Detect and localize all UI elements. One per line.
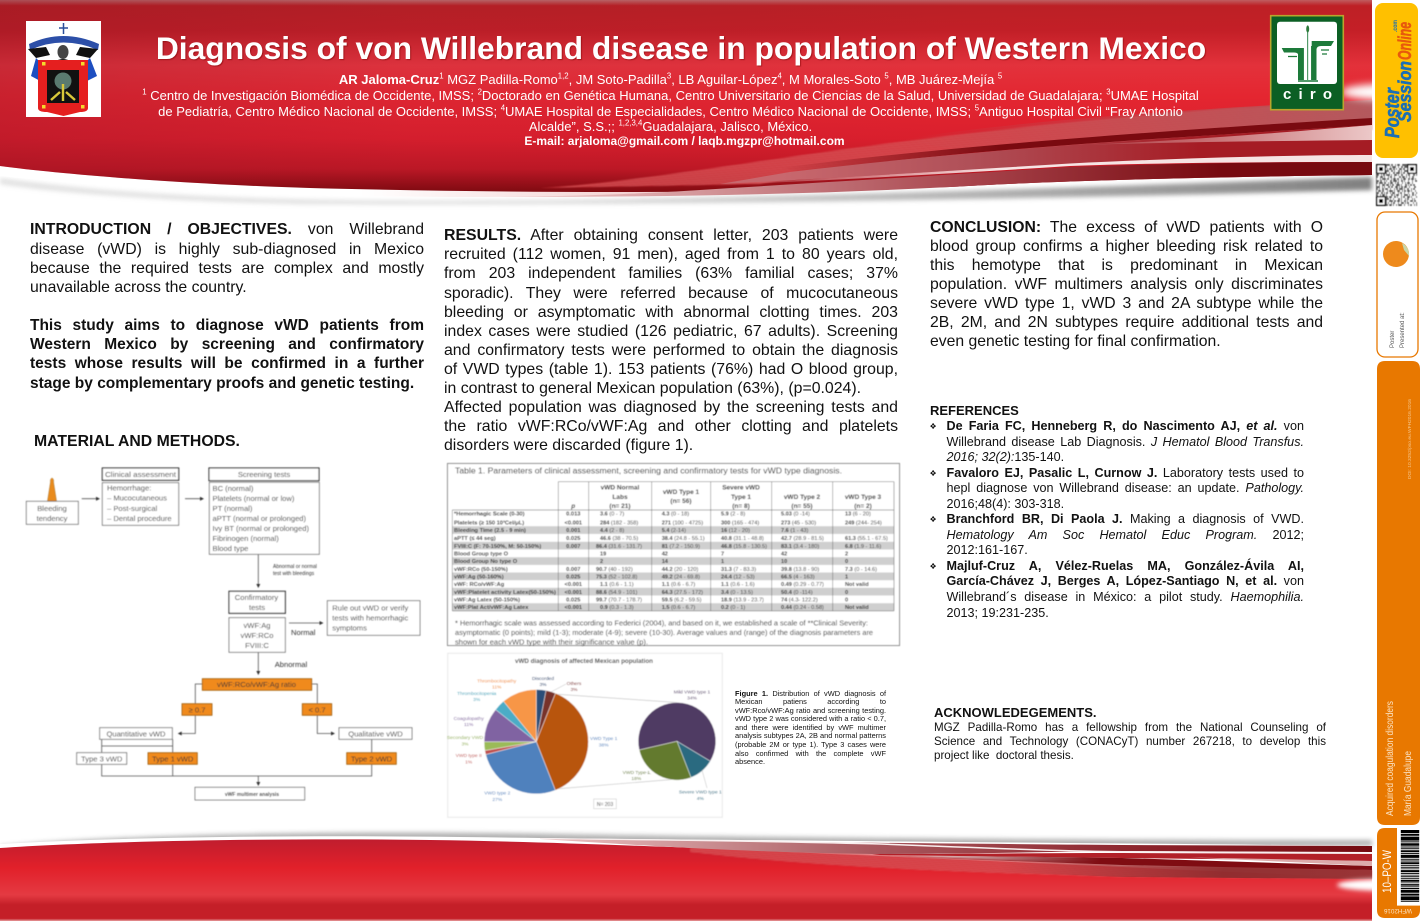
- sidebar: poster code and barcode: WFH2016: [1384, 907, 1412, 914]
- pie data labels: Secondary VWD: [447, 735, 484, 741]
- pie data labels: VWD type 2: [484, 790, 511, 796]
- text block: introduction and objectives: [30, 221, 424, 296]
- table 1: parameters: Not valid: [845, 582, 869, 588]
- table 1: parameters: 4.4 (2 - 8): [600, 528, 624, 534]
- table title: Table 1. Parameters of clinical assessment, screening and confirmatory tests for vWD type diagnosis.: [455, 466, 842, 476]
- CIRO logo: [1271, 16, 1343, 110]
- table footnote: asymptomatic (0 points); mild (1-3); moderate (4-9); severe (10-30). Average values and (range) of the diagnosis parameters are: [455, 628, 873, 637]
- table 1: parameters: vWD Normal: [601, 484, 640, 492]
- sidebar: PosterSessionOnline tab: [1375, 3, 1418, 158]
- table 1: parameters: vWD Type 3: [845, 494, 882, 501]
- table 1: parameters: 86.4 (31.6 - 131.7): [596, 544, 642, 550]
- table 1: parameters: vWF:Ag Latex (50-150%): [454, 597, 520, 603]
- text block: study aim: This study aims to diagnose vWD patients from: [30, 317, 424, 334]
- sidebar: orange details panel: DOI: 10.3252/pso.eu.WFH2016.2016: [1407, 399, 1413, 479]
- text block: introduction and objectives: because the required tests are complex and mostly: [30, 260, 424, 277]
- footer banner: [0, 832, 1424, 921]
- table 1: parameters: 249 (244- 254): [845, 520, 882, 526]
- figure 1 caption: absence.: [735, 757, 765, 766]
- secondary pie: [638, 702, 716, 780]
- sidebar: PosterSessionOnline tab: Online: [1395, 22, 1415, 60]
- pie data labels: VWD Type 1: [590, 736, 618, 742]
- pie data labels: 38%: [599, 742, 609, 748]
- table 1: parameters: 61.3 (55.1 - 67.5): [845, 536, 888, 542]
- text block: results: the ratio vWF:RCo/vWF:Ag and other clotting and platelets: [444, 418, 898, 435]
- flowchart: diagnostic algorithm: Ivy BT (normal or prolonged): [212, 524, 309, 533]
- table 1: parameters: <0.001: [565, 520, 582, 526]
- pie data labels: 27%: [492, 797, 503, 803]
- table 1: parameters: 1.1 (0.6 - 1.1): [600, 582, 634, 588]
- table 1: parameters: 42: [781, 551, 787, 557]
- acknowledgements text: MGZ Padilla-Romo has a fellowship from the National Counseling of: [934, 720, 1326, 734]
- table 1: parameters: 3.4 (0 - 13.5): [721, 590, 753, 596]
- sidebar: presented-at card: Presented at:: [1400, 312, 1406, 348]
- flowchart: diagnostic algorithm: tests with hemorrhagic: [332, 614, 408, 622]
- sidebar: orange details panel: [1377, 361, 1420, 825]
- table 1: parameters: 6.8 (1.9 - 11.6): [845, 544, 881, 550]
- flowchart: diagnostic algorithm: – Mucocutaneous: [107, 494, 167, 502]
- table 1: parameters: 46.6 (38 - 70.5): [600, 536, 638, 542]
- table footnote: [455, 618, 873, 646]
- pie data labels: Discorded: [532, 676, 554, 682]
- table footnote: shown for each vWD type with their significance value (p).: [455, 637, 648, 646]
- pie data labels: 3%: [539, 682, 547, 688]
- affiliations: de Pediatría, Centro Médico Nacional de Occidente, IMSS; 4UMAE Hospital de Especialidades, Centro Médico Nacional de Occidente, IMSS; 5Antiguo Hospital Civil “Fray Antonio: [158, 103, 1183, 118]
- table 1: parameters: 75.3 (52 - 102.8): [596, 574, 637, 580]
- table 1: parameters: *Hemorrhagic Scale (0-30): [454, 511, 525, 517]
- flowchart: diagnostic algorithm: < 0.7: [308, 706, 326, 714]
- table 1: parameters: 0.025: [566, 597, 580, 603]
- table 1: parameters: vWF:RCo (50-150%): [454, 567, 508, 573]
- flowchart: diagnostic algorithm: Rule out vWD or verify: [332, 604, 408, 612]
- references list: De Faria FC, Henneberg R, do Nascimento AJ, et al. von: [946, 419, 1304, 433]
- table 1: parameters: 1.1 (0.6 - 1.6): [721, 582, 755, 588]
- text block: study aim: Western Mexico by screening and confirmatory: [30, 336, 424, 353]
- text block: results: sporadic). They were referred because of mucocutaneous: [444, 285, 898, 302]
- figure 1 caption: vWD type 2 was considered with a ratio < 0.7,: [735, 714, 886, 723]
- table 1: parameters: 0.007: [566, 544, 580, 550]
- references list: 2012:161-167.: [946, 543, 1028, 557]
- pie data labels: Thrombocitopenia: [457, 691, 497, 697]
- flowchart: diagnostic algorithm: Abnormal: [275, 660, 308, 669]
- flowchart: diagnostic algorithm: tendency: [37, 514, 68, 523]
- sidebar: PosterSessionOnline tab: Session: [1395, 61, 1415, 122]
- table 1: parameters: 0: [845, 597, 848, 603]
- flowchart: diagnostic algorithm: aPTT (normal or prolonged): [212, 514, 307, 523]
- flowchart: diagnostic algorithm: – Dental procedure: [107, 514, 172, 523]
- table 1: parameters: 5.03 (0 -14): [781, 511, 810, 517]
- table 1: parameters: 2: [845, 551, 848, 557]
- table 1: parameters: 49.2 (24 - 69.8): [662, 574, 700, 580]
- main pie: [484, 690, 588, 794]
- table 1: parameters: 19: [600, 551, 606, 557]
- figure 1 caption: and there were identified by vWF multimer: [735, 723, 886, 732]
- references list: 2013; 19:231-235.: [946, 606, 1049, 620]
- acknowledgements text: Science and Technology (CONACyT) number 267218, to develop this: [934, 734, 1326, 748]
- table 1: parameters: 300 (165 - 474): [721, 520, 759, 526]
- text block: results: bleeding or asymptomatic with abnormal clotting times. 203: [444, 304, 898, 321]
- text block: results: in contrast to general Mexican population (63%), (p=0.024).: [444, 380, 861, 397]
- table 1: parameters: 44.2 (20 - 120): [662, 567, 699, 573]
- table 1: parameters: p: [570, 503, 575, 510]
- affiliations: 1 Centro de Investigación Biomédica de Occidente, IMSS; 2Doctorado en Genética Humana, Centro Universitario de Ciencias de la Salud, Universidad de Guadalajara; 3UMAE Hospital: [142, 88, 1199, 103]
- table 1: parameters: 50.4 (0 -114): [781, 590, 813, 596]
- table 1: parameters: (n= 21): [609, 503, 631, 510]
- university crest logo: [26, 21, 101, 117]
- text block: conclusion: population. vWF multimers analysis only discriminates: [930, 276, 1323, 293]
- affiliations: [142, 88, 1199, 134]
- text block: conclusion: 2B, 2M, and 2N subtypes require additional tests and: [930, 314, 1323, 331]
- table 1: parameters: Type 1: [731, 494, 751, 501]
- pie data labels: Thrombocitopathy: [477, 678, 517, 684]
- table 1: parameters: 7.3 (0 - 14.6): [845, 567, 877, 573]
- table 1: parameters: 46.8 (15.8 - 130.5): [721, 544, 767, 550]
- table 1: parameters: 99.7 (70.7 - 178.7): [596, 597, 642, 603]
- table 1: parameters: 0.025: [566, 536, 580, 542]
- sidebar: orange details panel: María Guadalupe: [1402, 751, 1414, 816]
- flowchart: diagnostic algorithm: Type 3 vWD: [81, 754, 123, 764]
- references list: Hematology Am Soc Hematol Educ Program. 2012;: [946, 528, 1304, 542]
- text block: results: RESULTS. After obtaining consent letter, 203 patients were: [444, 227, 898, 244]
- table 1: parameters: <0.001: [565, 590, 582, 596]
- table 1: parameters: vWD Type 1: [663, 489, 700, 496]
- references list: Willebrand´s disease in México: a pilot study. Haemophilia.: [946, 590, 1304, 604]
- table 1: parameters: 0.025: [566, 574, 580, 580]
- pie data labels: Coagulopathy: [454, 716, 484, 722]
- flowchart: diagnostic algorithm: Hemorrhage:: [107, 484, 151, 492]
- pie data labels: 3%: [461, 742, 469, 748]
- poster title: Diagnosis of von Willebrand disease in population of Western Mexico: [156, 30, 1206, 66]
- chart title: vWD diagnosis of affected Mexican population: [515, 658, 653, 665]
- table 1: parameters: aPTT (≤ 44 seg): [454, 536, 496, 542]
- flowchart: diagnostic algorithm: BC (normal): [212, 484, 254, 493]
- QR code: [1376, 164, 1417, 206]
- contact email: E-mail: arjaloma@gmail.com / laqb.mgzpr@hotmail.com: [524, 134, 845, 148]
- sidebar: poster code and barcode: [1377, 828, 1420, 918]
- text block: conclusion: CONCLUSION: The excess of vWD patients with O: [930, 219, 1323, 236]
- text block: study aim: [30, 317, 424, 392]
- pie data labels: 3%: [570, 687, 578, 693]
- text block: conclusion: severe vWD type 1, vWD 3 and 2A subtype while the: [930, 295, 1323, 312]
- flowchart: diagnostic algorithm: FVIII:C: [245, 641, 269, 650]
- text block: conclusion: [930, 219, 1323, 350]
- flowchart: diagnostic algorithm: symptoms: [332, 624, 367, 632]
- table 1: parameters: 10: [781, 559, 787, 565]
- table 1: parameters: 0.001: [566, 528, 580, 534]
- text block: results: Affected population was diagnosed by the screening tests and: [444, 399, 898, 416]
- flowchart: diagnostic algorithm: tests: [249, 603, 265, 612]
- table 1: parameters: FVIII:C (F: 70-150%, M: 50-150%): [454, 544, 541, 550]
- text block: introduction and objectives: disease (vWD) is highly sub-diagnosed in Mexico: [30, 240, 424, 258]
- pie data labels: VWD Type 1: [623, 770, 650, 776]
- references list: Favaloro EJ, Pasalic L, Curnow J. Laboratory tests used to: [946, 466, 1304, 480]
- pie data labels: 3%: [473, 697, 481, 703]
- pie data labels: 1%: [465, 760, 473, 766]
- pie data labels: [447, 676, 722, 803]
- table 1: parameters: vWF:Plat Act/vWF:Ag Latex: [454, 605, 529, 611]
- references list: 2016; 32(2):135-140.: [946, 450, 1064, 464]
- table 1: parameters: 3.6 (0 - 7): [600, 511, 624, 517]
- references list: 2016;48(4): 303-318.: [946, 497, 1064, 511]
- table 1: parameters: 0.9 (0.3 - 1.3): [600, 605, 634, 611]
- table 1: parameters: 0.44 (0.24 - 0.58): [781, 605, 824, 611]
- table 1: parameters: 13 (6 - 20): [845, 511, 871, 517]
- table 1: parameters: 1: [721, 559, 724, 565]
- flowchart: diagnostic algorithm: Confirmatory: [235, 593, 278, 602]
- table 1: parameters: Blood Group No type O: [454, 559, 518, 565]
- pie data labels: Mild VWD type 1: [674, 690, 710, 696]
- flowchart: diagnostic algorithm: vWF:RCo/vWF:Ag ratio: [217, 680, 296, 689]
- flowchart: diagnostic algorithm: Normal: [291, 628, 316, 637]
- flowchart: diagnostic algorithm: Screening tests: [238, 470, 290, 479]
- flowchart: diagnostic algorithm: test with bleedings: [273, 571, 315, 577]
- flowchart: diagnostic algorithm: Type 1 vWD: [152, 754, 194, 764]
- pie data labels: 34%: [687, 696, 698, 702]
- table 1: parameters: Severe vWD: [722, 484, 760, 492]
- pie data labels: Severe VWD type 1: [679, 790, 722, 796]
- text block: results: recruited (112 women, 91 men), aged from 1 to 80 years old,: [444, 246, 898, 263]
- table 1: parameters: 4.3 (0 - 18): [662, 511, 689, 517]
- heading: material and methods: MATERIAL AND METHODS.: [34, 433, 240, 450]
- table 1: parameters: (n= 2): [854, 503, 872, 510]
- pie data labels: Others: [567, 681, 582, 687]
- figure 1 caption: Mexican patiens according to: [735, 697, 886, 706]
- acknowledgements heading: ACKNOWLEDEGEMENTS.: [934, 704, 1096, 720]
- flowchart: diagnostic algorithm: Platelets (normal or low): [212, 494, 295, 503]
- table 1: parameters: 14: [662, 559, 669, 565]
- references list: [930, 419, 1304, 620]
- table 1: parameters: [448, 464, 900, 646]
- sidebar: presented-at card: Poster: [1390, 331, 1396, 348]
- table 1: parameters: 42.7 (28.9 - 81.5): [781, 536, 824, 542]
- text block: conclusion: blood group confirms a higher bleeding risk related to: [930, 238, 1323, 255]
- flowchart: diagnostic algorithm: vWF multimer analysis: [225, 792, 279, 798]
- acknowledgements text: [934, 720, 1326, 762]
- sidebar: presented-at card: [1377, 212, 1418, 357]
- table 1: parameters: 0.007: [566, 567, 580, 573]
- text block: introduction and objectives: unavailable across the country.: [30, 279, 247, 296]
- table 1: parameters: <0.001: [565, 582, 582, 588]
- table 1: parameters: 90.7 (40 - 192): [596, 567, 633, 573]
- flowchart: diagnostic algorithm: Quantitative vWD: [106, 730, 166, 738]
- table 1: parameters: (n= 55): [791, 503, 813, 510]
- table 1: parameters: vWD Type 2: [784, 494, 821, 501]
- figure 1 caption: (probable 2M or type 1). Type 3 cases were: [735, 740, 886, 749]
- flowchart: diagnostic algorithm: vWF:Ag: [243, 621, 271, 630]
- pie data labels: 11%: [464, 722, 474, 728]
- text: ❖: [930, 562, 937, 571]
- flowchart: diagnostic algorithm: Qualitative vWD: [348, 730, 403, 738]
- pie data labels: 11%: [492, 684, 502, 690]
- references list: Branchford BR, Di Paola J. Making a diagnosis of VWD.: [946, 512, 1304, 526]
- text block: results: index cases were studied (126 pediatric, 67 adults). Screening: [444, 323, 898, 340]
- flowchart: diagnostic algorithm: Blood type: [212, 544, 248, 553]
- table 1: parameters: 81 (7.2 - 150.9): [662, 544, 700, 550]
- table 1: parameters: 7.6 (1 - 43): [781, 528, 809, 534]
- table 1: parameters: Bleeding Time (2.5 - 9 min): [454, 528, 526, 534]
- table 1: parameters: 0.49 (0.29 - 0.77): [781, 582, 824, 588]
- table 1: parameters: 16 (12 - 20): [721, 528, 750, 534]
- table 1: parameters: 0.013: [566, 511, 580, 517]
- affiliations: Alcalde”, S.S.;; 1,2,3,4Guadalajara, Jalisco, México.: [529, 119, 812, 134]
- table 1: parameters: vWF:Platelet activity Latex(50-150%): [454, 590, 556, 596]
- table 1: parameters: 39.8 (13.8 - 90): [781, 567, 819, 573]
- table 1: parameters: (n= 8): [732, 503, 750, 510]
- table 1: parameters: Platelets (≥ 150 10³Cel/μL): [454, 519, 524, 526]
- references list: Willebrand disease Lab Diagnosis. J Hematol Blood Transfus.: [946, 435, 1304, 449]
- table 1: parameters: 5.4 (2-14): [662, 528, 686, 534]
- figure 1 caption: also confirmed with the complete vWF: [735, 749, 886, 758]
- pie data labels: 18%: [631, 776, 642, 782]
- flowchart: diagnostic algorithm: Bleeding: [37, 504, 67, 513]
- table 1: parameters: 0: [845, 590, 848, 596]
- pie data labels: VWD type II: [456, 753, 482, 759]
- table footnote: * Hemorrhagic scale was assessed according to Federici (2004), and based on it, we established a scale of **Clinical Severity:: [455, 618, 868, 628]
- flowchart: diagnostic algorithm: vWF:RCo: [241, 631, 273, 640]
- table 1: parameters: 18.9 (13.9 - 23.7): [721, 597, 764, 603]
- figure 1 caption: [735, 688, 886, 766]
- table 1: parameters: 74 (4.3- 122.2): [781, 597, 818, 603]
- text: ❖: [930, 422, 937, 431]
- table 1: parameters: 42: [662, 551, 668, 557]
- table 1: parameters: Not valid: [845, 605, 869, 611]
- sidebar: PosterSessionOnline tab: .com: [1392, 20, 1399, 32]
- references heading: REFERENCES: [930, 403, 1019, 418]
- table 1: parameters: 5.9 (2 - 8): [721, 511, 745, 517]
- table 1: parameters: (n= 56): [670, 498, 692, 505]
- pie data labels: 4%: [697, 796, 704, 802]
- text block: conclusion: this hemotype that is predominant in Mexican: [930, 257, 1323, 274]
- sample size box: [594, 799, 616, 809]
- icon: congress logo: [1383, 241, 1409, 267]
- pie chart: vWD diagnosis distribution: N= 203: [597, 802, 613, 808]
- text block: results: [444, 227, 898, 454]
- table 1: parameters: 88.6 (54.9 - 101): [596, 590, 637, 596]
- table 1: parameters: 2: [600, 559, 603, 565]
- references list: García-Chávez J, Berges A, López-Santiago N, et al. von: [946, 574, 1304, 588]
- table 1: parameters: 64.3 (27.5 - 172): [662, 590, 703, 596]
- table 1: parameters: 59.5 (6.2 - 59.5): [662, 597, 702, 603]
- sidebar: orange details panel: Acquired coagulation disorders: [1384, 701, 1396, 816]
- header banner: [0, 0, 1424, 204]
- flowchart: diagnostic algorithm: PT (normal): [212, 504, 253, 513]
- text block: results: from 203 independent families (63% familial cases; 37%: [444, 265, 898, 282]
- text block: study aim: stage by complementary proofs and genetic testing.: [30, 375, 414, 392]
- figure 1 caption: Figure 1. Distribution of vWD diagnosis of: [735, 688, 886, 698]
- table 1: parameters: 1.1 (0.6 - 6.7): [662, 582, 695, 588]
- table 1: parameters: 273 (45 - 530): [781, 520, 816, 526]
- references list: hepl diagnose von Willebrand disease: an update. Pathology.: [946, 481, 1304, 495]
- flowchart: diagnostic algorithm: – Post-surgical: [107, 504, 158, 513]
- table 1: parameters: 24.4 (12 - 53): [721, 574, 755, 580]
- figure 1 caption: vWF:Rco/vWF:Ag ratio and screening testing.: [735, 706, 886, 715]
- table 1: parameters: 66.5 (4 - 163): [781, 574, 815, 580]
- text block: results: disorders were discarded (figure 1).: [444, 437, 693, 454]
- table 1: parameters: 7: [721, 551, 724, 557]
- table 1: parameters: Blood Group type O: [454, 551, 509, 557]
- text: ❖: [930, 469, 937, 478]
- table 1: parameters: 0.2 (0 - 1): [721, 605, 745, 611]
- icon: bleeding figure: [48, 478, 56, 501]
- flowchart: diagnostic algorithm: Abnormal or normal: [273, 564, 317, 570]
- text block: introduction and objectives: INTRODUCTION / OBJECTIVES. von Willebrand: [30, 221, 424, 238]
- table 1: parameters: 40.8 (31.1 - 48.8): [721, 536, 764, 542]
- table 1: parameters: vWF:Ag (50-160%): [454, 574, 504, 580]
- table 1: parameters: 271 (100 - 4725): [662, 520, 703, 526]
- CIRO logo: ciro: [1283, 86, 1332, 103]
- acknowledgements text: project like doctoral thesis.: [934, 748, 1074, 762]
- text block: results: and confirmatory tests were performed to obtain the diagnosis: [444, 342, 898, 359]
- sidebar: PosterSessionOnline tab: Poster: [1382, 87, 1404, 138]
- flowchart: diagnostic algorithm: [26, 468, 420, 800]
- text block: conclusion: even genetic testing for final confirmation.: [930, 333, 1221, 350]
- table 1: parameters: 38.4 (24.8 - 55.1): [662, 536, 705, 542]
- pie chart: vWD diagnosis distribution: [447, 653, 722, 817]
- table 1: parameters: 0: [845, 559, 848, 565]
- table 1: parameters: <0.001: [565, 605, 582, 611]
- sidebar: poster code and barcode: 10–PO-W: [1380, 849, 1394, 893]
- table 1: parameters: Labs: [612, 494, 628, 501]
- text: ❖: [930, 515, 937, 524]
- authors: AR Jaloma-Cruz1 MGZ Padilla-Romo1,2, JM Soto-Padilla3, LB Aguilar-López4, M Morales-Soto 5, MB Juárez-Mejía 5: [339, 72, 1002, 87]
- flowchart: diagnostic algorithm: Fibrinogen (normal): [212, 534, 279, 543]
- table 1: parameters: 83.1 (3.4 - 180): [781, 544, 819, 550]
- table 1: parameters: 31.3 (7 - 83.3): [721, 567, 756, 573]
- table 1: parameters: 1.5 (0.6 - 6.7): [662, 605, 695, 611]
- flowchart: diagnostic algorithm: Type 2 vWD: [351, 754, 393, 764]
- table 1: parameters: vWF: RCo/vWF:Ag: [454, 582, 505, 588]
- flowchart: diagnostic algorithm: ≥ 0.7: [189, 706, 205, 714]
- table 1: parameters: 1: [845, 574, 848, 580]
- references list: Majluf-Cruz A, Vélez-Ruelas MA, González-Ávila AI,: [946, 559, 1304, 573]
- figure 1 caption: analysis subtypes 2A, 2B and normal patterns: [735, 731, 886, 740]
- text block: study aim: tests whose results will be confirmed in a further: [30, 355, 424, 372]
- table 1: parameters: 284 (182 - 358): [600, 520, 638, 526]
- text block: results: of VWD types (table 1). 153 patients (76%) had O blood group,: [444, 361, 898, 378]
- flowchart: diagnostic algorithm: Clinical assessment: [105, 470, 177, 479]
